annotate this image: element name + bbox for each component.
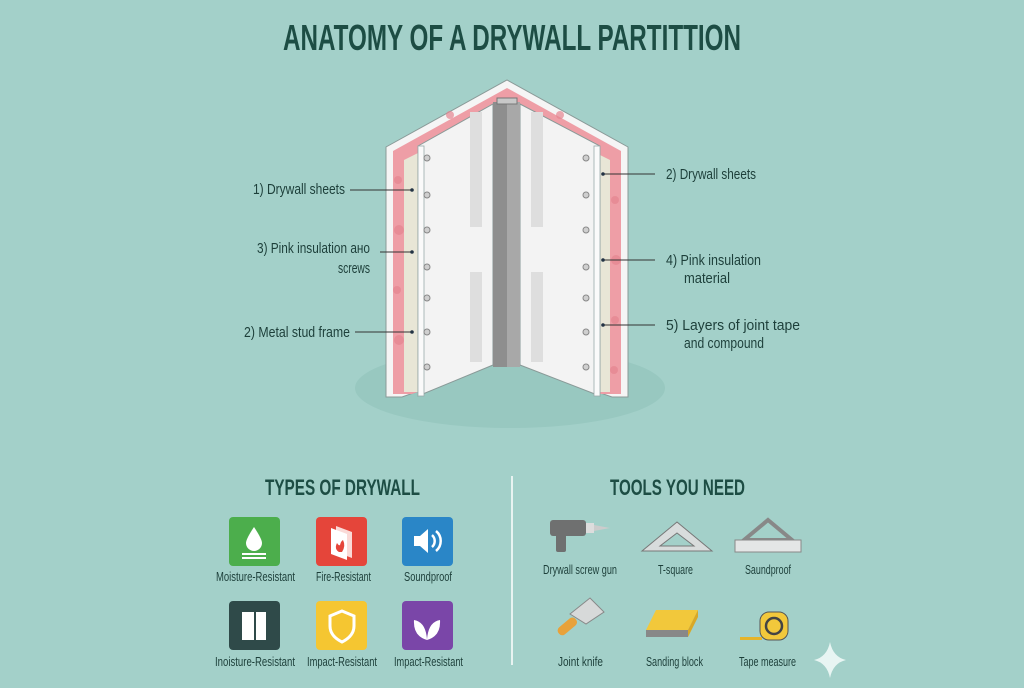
right labels: material [684, 270, 730, 287]
icon: screw gun [543, 520, 617, 577]
heading: tools: TOOLS YOU NEED [610, 475, 745, 500]
icon: fire: Fire-Resistant [316, 569, 371, 584]
icon: ruler: Saundproof [745, 562, 791, 577]
left labels: 2) Metal stud frame [244, 324, 350, 341]
metal stud [493, 98, 520, 367]
icon: moisture: Moisture-Resistant [216, 569, 295, 584]
icon: fire [316, 517, 371, 584]
icon: joint knife [556, 598, 604, 669]
icon: tape measure [739, 612, 796, 669]
icon: sanding block [646, 610, 703, 669]
left labels: 1) Drywall sheets [253, 181, 345, 198]
icon: leaves [394, 601, 463, 669]
icon: soundproof [402, 517, 453, 584]
icon: t-square [642, 522, 712, 577]
icon: screw gun: Drywall screw gun [543, 562, 617, 577]
icon: joint knife: Joint knife [558, 654, 603, 669]
right labels: 5) Layers of joint tape [666, 317, 800, 334]
right labels: and compound [684, 335, 764, 352]
icon: leaves: Impact-Resistant [394, 654, 463, 669]
icon: layers [215, 601, 295, 669]
icon: moisture [216, 517, 295, 584]
icon: t-square: T-square [658, 562, 693, 577]
icon: soundproof: Soundproof [404, 569, 452, 584]
sparkle [814, 642, 846, 678]
icon: shield: Impact-Resistant [307, 654, 377, 669]
icon: ruler [735, 520, 801, 577]
icon: tape measure: Tape measure [739, 654, 796, 669]
left labels: 3) Pink insulation aно [257, 240, 370, 257]
title: ANATOMY OF A DRYWALL PARTITTION [283, 17, 741, 58]
right labels: 4) Pink insulation [666, 252, 761, 269]
wall diagram [355, 80, 665, 428]
types icons [215, 517, 463, 669]
icon: sanding block: Sanding block [646, 654, 703, 669]
right labels: 2) Drywall sheets [666, 166, 756, 183]
right labels [601, 166, 800, 352]
left labels: screws [338, 260, 370, 277]
icon: shield [307, 601, 377, 669]
heading: types of drywall: TYPES OF DRYWALL [265, 475, 420, 500]
left labels [244, 181, 414, 341]
divider [511, 476, 513, 665]
tools [543, 520, 801, 669]
icon: layers: Inoisture-Resistant [215, 654, 295, 669]
